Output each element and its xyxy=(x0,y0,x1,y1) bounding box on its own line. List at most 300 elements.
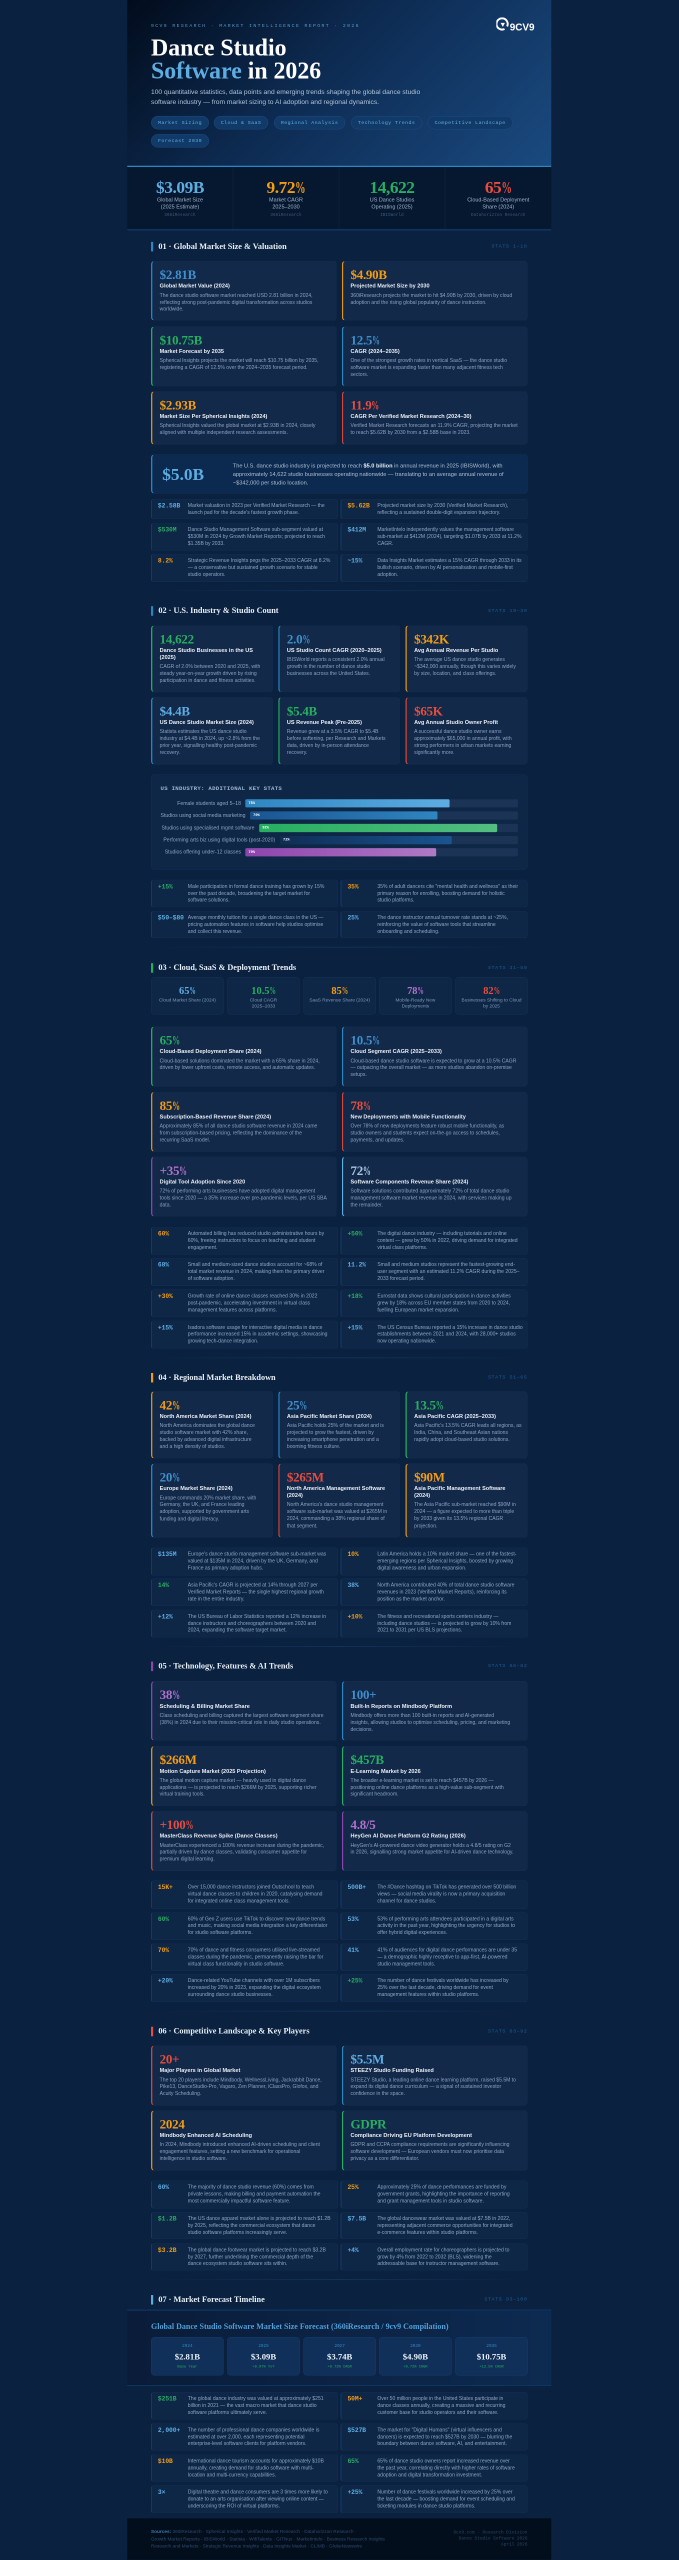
stat card xyxy=(342,2045,527,2106)
stat card xyxy=(342,326,527,386)
mini stat: management features within studio platforms. xyxy=(377,1992,479,1997)
mini stat: emerging regions per Spherical Insights, boosted by growing xyxy=(377,1558,513,1564)
mini stat: customer base for studio operators and their software. xyxy=(377,2410,498,2415)
stat card: HeyGen AI Dance Platform G2 Rating (2026) xyxy=(350,1832,466,1839)
tile: 82 xyxy=(483,985,494,997)
mini stat: offer hybrid digital experiences. xyxy=(377,1930,447,1935)
mini stat xyxy=(341,1974,527,2002)
section heading xyxy=(151,1662,527,1671)
mini stat: 70% of dance and fitness consumers utilised live-streamed xyxy=(188,1947,320,1953)
bar: specialised software xyxy=(161,824,518,832)
mini stat xyxy=(341,554,527,582)
stat card: software development — European vendors must now prioritise data xyxy=(350,2149,504,2155)
section 04: regional xyxy=(151,1372,528,1638)
mini stat: content — grew by 50% in 2022, driving demand for integrated xyxy=(377,1238,518,1243)
stat card: US Dance Studio Market Size (2024) xyxy=(160,719,254,725)
stat card xyxy=(342,1681,527,1741)
pill: Cloud & SaaS xyxy=(221,120,261,125)
stat card: adoption and the rising global popularity of dance instruction. xyxy=(350,300,487,305)
tile: Mobile-Ready New xyxy=(395,997,435,1003)
stat card: Avg Annual Revenue Per Studio xyxy=(414,647,498,653)
callout xyxy=(151,454,527,494)
mini stat: +10% xyxy=(347,1614,362,1620)
subtitle: 100 quantitative statistics, data points and emerging trends shaping the global dance studio xyxy=(151,88,420,96)
mini stat xyxy=(151,1258,338,1286)
mini stat xyxy=(151,2423,338,2451)
stat: Share (2024) xyxy=(482,204,514,210)
stat card: STEEZY Studio, a leading online dance learning platform, raised $5.5M to xyxy=(350,2077,516,2083)
mini stat: The US Census Bureau reported a 15% increase in dance studio xyxy=(377,1324,523,1330)
pill xyxy=(274,116,345,129)
mini stat: CAGR. xyxy=(377,540,393,546)
mini stat: $530M in 2024 by Growth Market Reports; projected to reach xyxy=(188,534,325,539)
stat card: % xyxy=(363,1099,371,1113)
stat card: $2.81B xyxy=(160,268,196,282)
stat card: Cloud-Based Deployment Share (2024) xyxy=(160,1048,262,1054)
mini stat xyxy=(341,911,527,938)
stat card: Spherical Insights projects the market will reach $10.75 billion by 2035, xyxy=(160,358,318,363)
footer credit: April 2026 xyxy=(501,2543,527,2547)
stat: (2025 Estimate) xyxy=(161,204,199,210)
section heading xyxy=(151,963,527,973)
mini stat: e-commerce features within studio platforms. xyxy=(377,2230,478,2235)
tile: % xyxy=(494,985,500,997)
stat card: % xyxy=(172,1099,180,1113)
callout: ~$342,000 per studio location. xyxy=(233,479,308,486)
stat card: recovery. xyxy=(287,750,307,755)
stat card: positioning online dance platforms as a high-value sub-segment with xyxy=(350,1785,504,1790)
section heading: 01 · Global Market Size & Valuation xyxy=(158,242,287,251)
stat: % xyxy=(501,177,512,197)
stat card: 72 xyxy=(350,1164,363,1178)
mini stat xyxy=(151,880,338,907)
stat card: Major Players in Global Market xyxy=(160,2067,240,2073)
forecast tile xyxy=(227,2337,300,2376)
mini stat: Approximately 25% of dance performances are funded by xyxy=(377,2184,506,2190)
mini stat: ~15% xyxy=(347,558,362,565)
forecast tile: $2.81B xyxy=(175,2352,200,2362)
mini stat: adoption. xyxy=(377,572,398,577)
stat card xyxy=(151,1463,273,1538)
mini stat: The number of professional dance companies worldwide is xyxy=(188,2427,319,2433)
mini stat: billion in 2021 — the vast macro market that dance studio xyxy=(188,2403,317,2408)
stat card xyxy=(151,1391,273,1459)
stat card: Cloud-based solutions dominated the market with a 65% share in 2024, xyxy=(160,1058,320,1064)
stat card xyxy=(405,1391,527,1459)
mini stat: $530M xyxy=(158,527,176,534)
mini stat: — a demographic highly receptive to app-first, AI-powered xyxy=(377,1954,507,1960)
tile: Cloud Market Share (2024) xyxy=(159,997,216,1003)
stat card: Software solutions contributed approximately 72% of total dance studio xyxy=(350,1188,509,1194)
stat card xyxy=(342,261,527,321)
stat card xyxy=(342,1026,527,1087)
mini stat: 2021 to 2031 per US BLS projections. xyxy=(377,1627,462,1633)
mini stat xyxy=(341,1258,527,1286)
stat card: CAGR Per Verified Market Research (2024–30) xyxy=(350,413,471,419)
stat card: (2024) xyxy=(414,1492,430,1498)
tile: 78 xyxy=(407,985,417,997)
mini stat xyxy=(341,2243,527,2271)
mini stat: for studio software platforms. xyxy=(188,1930,253,1935)
mini stat: 41% xyxy=(347,1947,359,1954)
section 03: cloud and SaaS xyxy=(151,963,528,1348)
stat card xyxy=(151,697,273,765)
pill: Market Sizing xyxy=(158,120,202,125)
mini stat xyxy=(341,499,527,519)
forecast tile xyxy=(151,2337,224,2376)
stat card: % xyxy=(172,1398,180,1412)
stat card: 2.0 xyxy=(287,632,302,646)
mini stat: +25% xyxy=(347,1978,362,1985)
stat card: 42 xyxy=(160,1398,172,1412)
stat card: software sub-market was valued at $265M in xyxy=(287,1509,387,1515)
mini stat: 8.2% xyxy=(158,558,173,565)
bar: under-12 classes: 70% xyxy=(248,850,255,854)
mini stat: Automated billing has reduced studio administrative hours by xyxy=(188,1231,324,1236)
stat card: % xyxy=(302,632,310,646)
stat card: 38 xyxy=(160,1688,172,1702)
stat card: Europe Market Share (2024) xyxy=(160,1485,233,1492)
stat: Operating (2025) xyxy=(371,204,413,210)
mini stat: The digital dance industry — including tutorials and online xyxy=(377,1231,507,1236)
logo: 9CV9 xyxy=(496,17,535,33)
mini stat xyxy=(151,1943,338,1971)
stat card xyxy=(151,2045,337,2106)
mini stat: 25% xyxy=(347,915,359,922)
mini stat: 15K+ xyxy=(158,1884,173,1891)
mini stat xyxy=(341,1881,527,1909)
stat card: US Studio Count CAGR (2020–2025) xyxy=(287,647,382,653)
stat card xyxy=(151,1811,337,1871)
stat card: India, China, and Southeast Asian nations xyxy=(414,1430,508,1435)
bar: specialised software: 92% xyxy=(262,826,269,830)
stat card: $5.5M xyxy=(350,2052,384,2067)
stat card: 11.9 xyxy=(350,398,371,412)
tile xyxy=(227,977,300,1015)
stat card: registering a CAGR of 12.5% over the 2024–2035 forecast period. xyxy=(160,365,308,370)
stat card: A successful dance studio owner earns xyxy=(414,729,502,734)
stat card: North America Market Share (2024) xyxy=(160,1413,251,1419)
stat card: Statista estimates the US dance studio xyxy=(160,729,247,734)
mini stat: donate to an arts organisation after viewing online content — xyxy=(188,2496,324,2502)
mini stat: dance instructors and choreographers between 2020 and xyxy=(188,1620,316,1626)
forecast tile: 2025 xyxy=(258,2344,269,2349)
mini stat: 35% of adult dancers cite "mental health and wellness" as their xyxy=(377,884,518,889)
mini stat: 68% xyxy=(158,1262,169,1269)
mini stat: $527B xyxy=(347,2427,366,2434)
stat card: $5.4B xyxy=(287,704,317,718)
mini stat: performance increased 15% in academic settings, showcasing xyxy=(188,1331,327,1337)
section heading: STATS 51–65 xyxy=(488,1375,527,1380)
mini stat: total market revenue in 2024, making them the primary driver xyxy=(188,1269,324,1274)
title: Software in 2026 xyxy=(151,57,321,84)
forecast tile: 2030 xyxy=(410,2344,421,2349)
mini stat: private lessons, making billing and payment automation the xyxy=(188,2191,320,2197)
mini stat: 35% xyxy=(347,884,359,890)
stat card: industry at $4.4B in 2024, up ~2.8% from the xyxy=(160,736,260,741)
mini stat: digital awareness and urban expansion. xyxy=(377,1565,466,1571)
mini stat xyxy=(341,2423,527,2451)
mini stat xyxy=(151,2180,338,2209)
mini stat: 65% of dance studio owners report increased revenue over xyxy=(377,2458,510,2464)
mini stat: Small and medium-sized dance studios account for ~68% of xyxy=(188,1262,322,1267)
mini stat: France as primary adoption hubs. xyxy=(188,1565,263,1571)
section 05: technology xyxy=(151,1662,528,2002)
stat card: Avg Annual Studio Owner Profit xyxy=(414,719,498,725)
mini stat xyxy=(151,1881,338,1909)
mini stat: $1.35B by 2033. xyxy=(188,540,225,546)
subtitle: software industry — from market sizing to AI adoption and regional dynamics. xyxy=(151,98,379,106)
stat card: reflecting strong post-pandemic digital transformation across studios xyxy=(160,300,312,305)
stat card: Asia Pacific Management Software xyxy=(414,1485,505,1492)
stat card: participation in dance and fitness activities. xyxy=(160,678,256,683)
bar: social media marketing: 70% xyxy=(253,813,260,817)
callout: $5.0B xyxy=(162,464,204,484)
mini stat xyxy=(151,911,338,938)
stat: Cloud-Based Deployment xyxy=(467,197,529,203)
stat: 2025–2030 xyxy=(272,204,300,210)
mini stat: activity in the past year, highlighting the urgency for studios to xyxy=(377,1923,515,1929)
pill xyxy=(214,116,268,129)
stat card: 14,622 xyxy=(160,632,194,646)
forecast title: Global Dance Studio Software Market Size Forecast (360iResearch / 9cv9 Compilation) xyxy=(151,2322,448,2331)
stat card: % xyxy=(372,1033,380,1048)
forecast tile: Base Year xyxy=(177,2365,197,2369)
forecast tile: 2035 xyxy=(486,2344,497,2349)
stat card: US Revenue Peak (Pre-2025) xyxy=(287,719,362,725)
mini stat: and collect this revenue. xyxy=(188,929,242,934)
mini stat xyxy=(341,2180,527,2209)
mini stat: Male participation in formal dance training has grown by 15% xyxy=(188,884,324,889)
mini stat: reflecting a sustained double-digit expansion trajectory. xyxy=(377,510,500,515)
stat card: businesses across the United States. xyxy=(287,671,370,676)
stat card: $342K xyxy=(414,632,449,646)
stat card: The top 20 players include Mindbody, WellnessLiving, Jackrabbit Dance, xyxy=(160,2077,322,2083)
mini stat: post-pandemic, accelerating investment in virtual class xyxy=(188,1300,310,1306)
stat card: 4.8/5 xyxy=(350,1818,376,1832)
mini stat: studio operators. xyxy=(188,572,225,577)
tile: % xyxy=(269,985,276,997)
mini stat: +12% xyxy=(158,1614,173,1620)
mini stat: software solutions. xyxy=(188,897,230,903)
mini stat xyxy=(151,2243,338,2271)
mini stat: The global dance industry was valued at approximately $251 xyxy=(188,2396,324,2401)
stat card: adoption, supported by government arts xyxy=(160,1509,249,1515)
tile: 2025–2033 xyxy=(252,1003,275,1009)
mini stat xyxy=(341,1610,527,1638)
mini stat xyxy=(151,499,338,519)
mini stat: management features across platforms. xyxy=(188,1307,277,1313)
mini stat xyxy=(151,1578,338,1606)
stat card: payments, and updates. xyxy=(350,1137,404,1143)
stat card xyxy=(151,326,337,386)
forecast tile: $4.90B xyxy=(403,2352,428,2362)
mini stat: MarketIntelo independently values the management software xyxy=(377,527,514,532)
stat card: in 2026, signalling strong market appetite for AI-driven dance technology. xyxy=(350,1849,513,1855)
mini stat: 60% xyxy=(158,1231,169,1238)
mini stat xyxy=(341,1578,527,1606)
section heading xyxy=(151,242,527,251)
mini stat: establishments between 2021 and 2024, with 28,000+ studios xyxy=(377,1331,516,1337)
stat card: Approximately 85% of all dance studio software revenue in 2024 came xyxy=(160,1123,317,1129)
stat card: projected to grow the fastest, driven by xyxy=(287,1430,374,1435)
forecast tile: 2024 xyxy=(182,2344,193,2349)
mini stat: Data Insights Market estimates a 15% CAGR through 2033 in its xyxy=(377,558,522,563)
mini stat xyxy=(341,2392,527,2420)
mini stat: Isadora software usage for interactive digital media in dance xyxy=(188,1324,322,1330)
stat card: +100 xyxy=(160,1818,185,1832)
section 06: competitive landscape xyxy=(151,2026,528,2270)
mini stat xyxy=(151,2212,338,2239)
stat card: rapidly adopt cloud-based studio solutions. xyxy=(414,1437,510,1442)
forecast band xyxy=(127,2309,551,2386)
mini stat: 500B+ xyxy=(347,1884,366,1891)
stat card: HeyGen's AI-powered dance video generator holds a 4.8/5 rating on G2 xyxy=(350,1842,511,1848)
stat card: 78 xyxy=(350,1099,363,1113)
stat card: Digital Tool Adoption Since 2020 xyxy=(160,1178,245,1185)
stat card xyxy=(342,1092,527,1152)
mini stat: ticketing modules in dance studio platforms. xyxy=(377,2503,475,2509)
mini stat: 70% xyxy=(158,1947,169,1954)
mini stat: onboarding and scheduling. xyxy=(377,929,439,934)
stat card: 360iResearch projects the market to hit $4.90B by 2030, driven by cloud xyxy=(350,293,512,298)
mini stat: sub-market at $412M (2024), targeting $1.07B by 2033 at 11.2% xyxy=(377,534,521,539)
mini stat xyxy=(341,1943,527,1971)
mini stat: 60% xyxy=(158,2184,169,2191)
mini stat: dance classes annually, creating a massive and recurring xyxy=(377,2403,505,2408)
stat card: One of the strongest growth rates in vertical SaaS — the dance studio xyxy=(350,358,507,363)
mini stat xyxy=(151,1912,338,1940)
mini stat: government grants, highlighting the importance of reporting xyxy=(377,2191,510,2197)
mini stat: including dance studios — is projected to grow by 10% from xyxy=(377,1620,511,1626)
title xyxy=(151,34,321,84)
mini stat: by 2025, reflecting the commercial ecosystem that dance xyxy=(188,2223,315,2228)
stat card xyxy=(151,391,337,445)
stat card: 2024, commanding a 38% regional share of xyxy=(287,1516,385,1522)
pill: Regional Analysis xyxy=(281,120,338,125)
mini stat: launch pad for the decade's fastest growth phase. xyxy=(188,510,299,515)
stat card: % xyxy=(172,1033,180,1048)
stat: 14,622 xyxy=(370,177,415,197)
tile xyxy=(379,977,452,1015)
mini stat: growing tech-dance integration. xyxy=(188,1338,258,1344)
mini stat: $50–$80 xyxy=(158,915,184,922)
section heading: STATS 31–50 xyxy=(488,965,527,971)
section heading: STATS 19–30 xyxy=(488,608,527,614)
stat card: data. xyxy=(160,1202,171,1208)
stat card: Asia Pacific's 13.5% CAGR leads all regions, as xyxy=(414,1423,522,1428)
stat card: $4.90B xyxy=(350,268,387,282)
headline stat bar xyxy=(127,167,551,231)
mini stat: +18% xyxy=(347,1293,362,1300)
mini stat: Small and medium studios represent the fastest-growing end- xyxy=(377,1262,515,1267)
section 01: global market size xyxy=(151,242,528,582)
stat card: Mindbody offers more than 100 built-in reports and AI-generated xyxy=(350,1713,494,1718)
stat card xyxy=(405,697,527,765)
stat card: (2025) xyxy=(160,654,176,660)
tag pills xyxy=(151,116,512,148)
stat card: North America's dance studio management xyxy=(287,1502,383,1508)
mini stat: 2024, expanding the software target market. xyxy=(188,1627,287,1633)
stat card: % xyxy=(363,1164,371,1178)
mini stat: International dance tourism accounts for approximately $10B xyxy=(188,2458,324,2464)
mini stat: The US dance apparel market alone is projected to reach $1.2B xyxy=(188,2216,331,2221)
mini stat: Overall employment rate for choreographers is projected to xyxy=(377,2247,509,2253)
sources xyxy=(151,2529,385,2549)
callout: approximately 14,622 studio businesses operating nationwide — translating to an average annual revenue of xyxy=(233,471,504,477)
stat card: ~$342,000 annually, though this varies widely xyxy=(414,664,516,669)
mini stat: virtual class platforms. xyxy=(377,1244,427,1250)
mini stat xyxy=(341,1547,527,1575)
forecast tile: +9.97% YoY xyxy=(252,2365,275,2369)
mini stat xyxy=(341,2212,527,2239)
stat card: 85 xyxy=(160,1099,172,1113)
stat card: In 2024, Mindbody introduced enhanced AI-driven scheduling and client xyxy=(160,2142,320,2147)
stat card: 72% of performing arts businesses have adopted digital management xyxy=(160,1188,315,1194)
mini stat: surrounding dance studio businesses. xyxy=(188,1992,273,1997)
mini stat: and music, making social media integration a key differentiator xyxy=(188,1923,327,1929)
bar: digital tools: Performing arts biz using digital tools (post-2020) xyxy=(163,837,275,843)
mini stat: +50% xyxy=(347,1231,362,1238)
stat card: prior year, signalling healthy post-pandemic xyxy=(160,743,257,748)
stat card xyxy=(151,2110,337,2171)
mini stat: +15% xyxy=(347,1324,362,1331)
stat card xyxy=(278,625,400,692)
tile xyxy=(455,977,528,1015)
forecast tile xyxy=(303,2337,376,2376)
mini stat: fuelling European market expansion. xyxy=(377,1307,459,1313)
mini stat: 41% of audiences for digital dance performances are under 35 xyxy=(377,1947,517,1953)
mini stat: studio management tools. xyxy=(377,1961,435,1967)
bar chart xyxy=(151,775,527,870)
stat card: decisions. xyxy=(350,1727,373,1732)
forecast tile xyxy=(455,2337,528,2376)
eyebrow: 9CV9 RESEARCH · MARKET INTELLIGENCE REPORT · 2026 xyxy=(151,23,360,29)
mini stat: Dance-related YouTube channels with over 1M subscribers xyxy=(188,1978,320,1983)
stat card: steady year-on-year growth driven by rising xyxy=(160,671,257,676)
stat card: The broader e-learning market is set to reach $457B by 2026 — xyxy=(350,1778,494,1783)
mini stat xyxy=(151,1610,338,1638)
mini stat: North America contributed 40% of total dance studio software xyxy=(377,1582,515,1588)
pill xyxy=(151,116,209,129)
stat card: funding and digital literacy. xyxy=(160,1516,219,1522)
mini stat: primary reason for enrolling, boosting demand for holistic xyxy=(377,890,505,896)
mini stat: most commercially impactful software feature. xyxy=(188,2198,290,2204)
subtitle xyxy=(151,88,420,106)
stat card: Built-In Reports on Mindbody Platform xyxy=(350,1703,452,1709)
mini stat xyxy=(151,1321,338,1349)
stat: Market CAGR xyxy=(269,197,303,203)
stat card: confidence in the space. xyxy=(350,2091,405,2097)
mini stat: Over 15,000 dance instructors joined Outschool to teach xyxy=(188,1884,314,1890)
footer credit: 9cv9.com · Research Division xyxy=(453,2530,527,2535)
bar: digital tools xyxy=(163,836,518,844)
mini stat: Growth rate of online dance classes reached 30% in 2022 xyxy=(188,1293,317,1299)
section heading xyxy=(151,2027,527,2036)
mini stat: 38% xyxy=(347,1582,359,1589)
stat card: North America Management Software xyxy=(287,1485,385,1492)
mini stat: annually, creating demand for studio software with multi- xyxy=(188,2465,314,2471)
chart title: US INDUSTRY: ADDITIONAL KEY STATS xyxy=(161,785,282,792)
stat card: the remainder. xyxy=(350,1202,383,1208)
mini stat: boundary between dance software, AI, and entertainment. xyxy=(377,2441,507,2446)
stat xyxy=(467,177,530,217)
mini stat: revenues in 2023 (Verified Market Reports), reinforcing its xyxy=(377,1589,507,1595)
mini stat: $135M xyxy=(158,1551,176,1558)
stat card: Software Components Revenue Share (2024) xyxy=(350,1178,468,1185)
mini stat: Projected market size by 2030 (Verified Market Research), xyxy=(377,503,508,508)
stat card: strong performers in urban markets earning xyxy=(414,743,511,748)
